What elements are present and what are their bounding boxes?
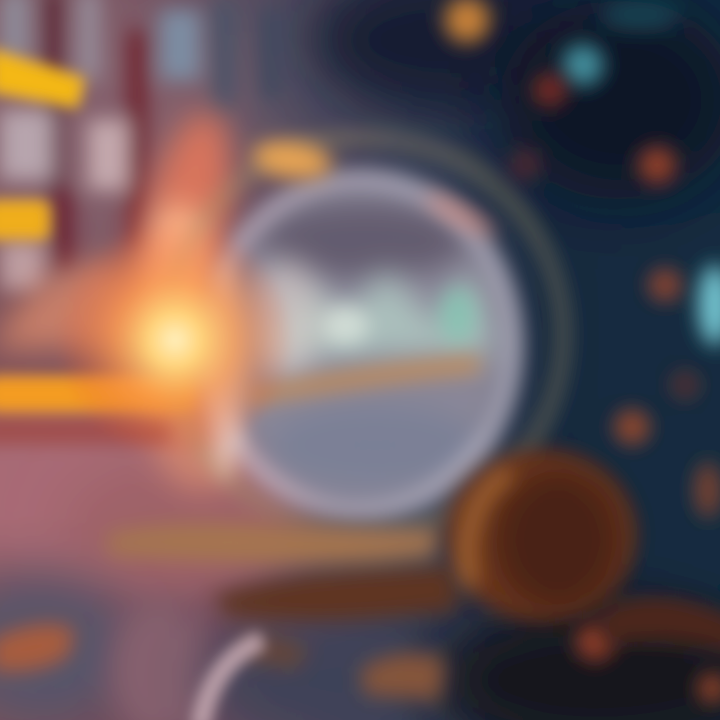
coral reflection on ring — [421, 187, 499, 243]
central flare — [55, 220, 295, 460]
bokeh lights — [445, 0, 720, 701]
yellow glowing bars, left edge — [0, 48, 85, 240]
inner lens ring — [208, 180, 512, 510]
orange highlight on ring — [250, 137, 334, 183]
orange flames around flare — [0, 110, 250, 490]
lens interior — [215, 180, 515, 510]
wooden ledge, lower centre — [0, 524, 460, 700]
hazy white glow on left of ring — [207, 260, 243, 480]
pale arc, bottom — [200, 640, 262, 720]
outer lens ring — [167, 137, 563, 533]
horizon glow bar — [0, 376, 195, 442]
vertical striped structures, top left — [0, 0, 280, 290]
brown sphere — [445, 450, 720, 655]
